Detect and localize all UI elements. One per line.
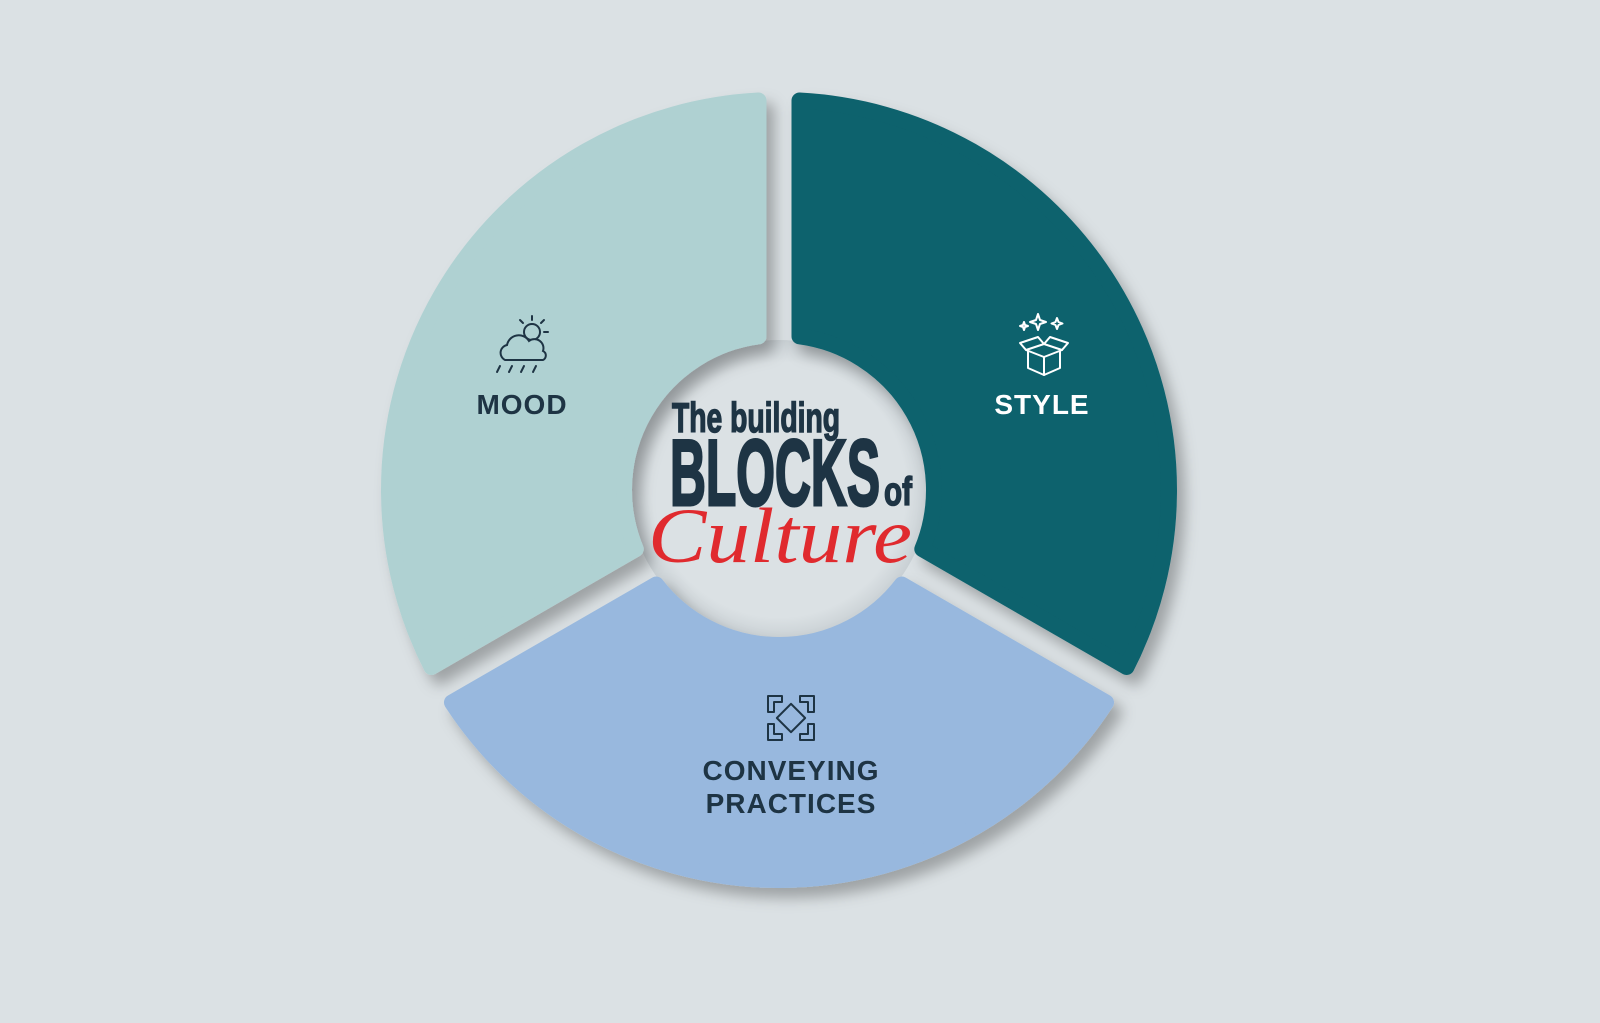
title — [648, 394, 912, 579]
panel: mood — [389, 101, 758, 667]
center hole — [629, 340, 929, 640]
icon: joined hands — [768, 696, 814, 740]
title: BLOCKS — [670, 420, 880, 525]
title: The building — [672, 394, 840, 441]
label: practices: PRACTICES — [706, 788, 876, 819]
label: mood: MOOD — [476, 389, 568, 420]
panel: conveying practices — [452, 585, 1106, 880]
panel: style — [800, 101, 1169, 667]
title: of — [884, 470, 912, 514]
label: conveying practices: CONVEYING — [702, 755, 880, 786]
icon: gift box — [1020, 314, 1068, 375]
icon: cloud sun rain — [497, 316, 548, 372]
title: Culture — [648, 492, 912, 579]
label: style: STYLE — [994, 389, 1090, 420]
